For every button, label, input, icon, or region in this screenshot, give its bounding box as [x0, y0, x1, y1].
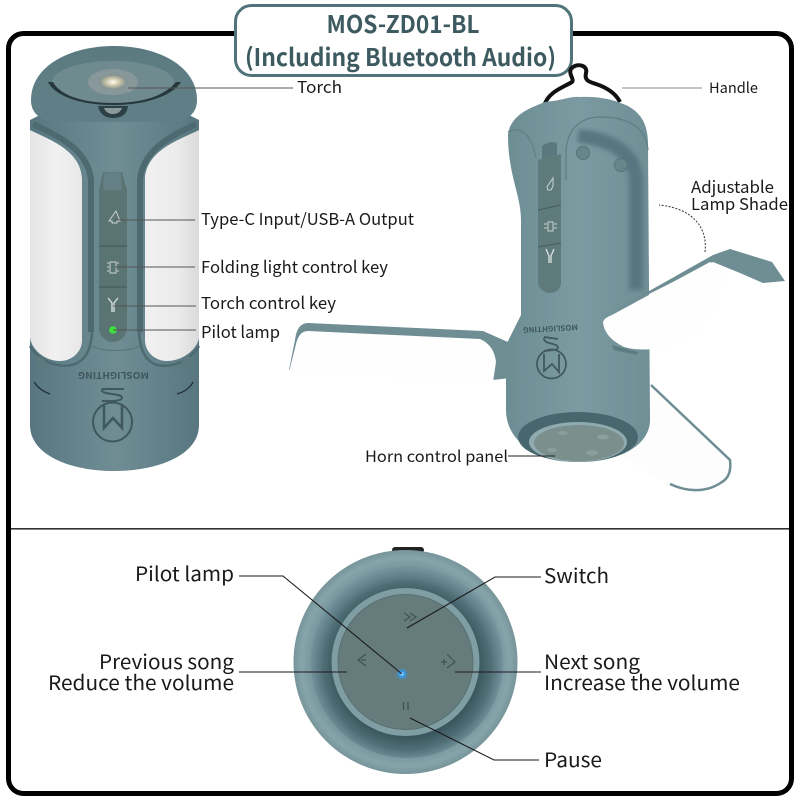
- label: previous song: Previous song: [99, 646, 234, 675]
- logo: MOSLIGHTING: [523, 322, 578, 335]
- lantern body: [506, 97, 650, 462]
- leader: switch: [407, 577, 541, 628]
- top cap: [31, 46, 197, 122]
- leader: folding light: [115, 266, 195, 268]
- label: reduce volume: Reduce the volume: [48, 667, 234, 696]
- left wing: [289, 323, 510, 382]
- label: type-c: Type-C Input/USB-A Output: [201, 206, 414, 230]
- recess: [311, 566, 503, 758]
- lower rim and logo: [30, 332, 199, 442]
- left light panel: [30, 130, 82, 361]
- icon: next: [441, 654, 455, 668]
- leader: handle: [622, 87, 702, 89]
- label: torch key: Torch control key: [201, 290, 336, 314]
- icon: pause: [404, 702, 408, 710]
- panel divider: [11, 528, 789, 530]
- callouts for lantern: [113, 88, 702, 456]
- logo: [523, 322, 578, 378]
- icon: type-c: [109, 211, 120, 223]
- outer shell: [294, 550, 518, 774]
- left shoulder arc: [508, 130, 536, 158]
- label: switch: Switch: [544, 560, 609, 589]
- callouts for panel: [239, 576, 541, 760]
- pilot lamp: green: [109, 326, 117, 334]
- label: torch: Torch: [297, 74, 342, 98]
- top tab: [392, 547, 424, 553]
- label: lamp shade: Lamp Shade: [691, 191, 788, 215]
- title box: (Including Bluetooth Audio): [245, 39, 556, 74]
- lantern body: [30, 112, 199, 471]
- leader: previous: [239, 671, 347, 673]
- icon: torch: [108, 298, 118, 312]
- leader: pause: [410, 718, 539, 760]
- upper right wing: [603, 249, 785, 355]
- label: adjustable: Adjustable: [691, 174, 774, 198]
- icon: folding light: [544, 222, 557, 231]
- horn recess and panel: [518, 412, 638, 462]
- leader: next: [455, 671, 541, 673]
- torch lens: [48, 61, 181, 118]
- stem grooves: [33, 124, 196, 332]
- leader: horn: [508, 455, 555, 457]
- label: pilot lamp: Pilot lamp: [135, 558, 234, 587]
- icon: switch: [404, 613, 416, 621]
- handle: [544, 65, 620, 106]
- label: horn panel: Horn control panel: [365, 445, 508, 467]
- inner recess band: [578, 136, 636, 290]
- icon: folding light: [107, 262, 119, 273]
- label: next song: Next song: [544, 646, 640, 675]
- lower rim and logo: MOSLIGHTING: [78, 369, 149, 383]
- pilot lamp: blue: [396, 668, 408, 680]
- label: folding light: Folding light control key: [201, 254, 388, 278]
- label: increase volume: Increase the volume: [544, 667, 740, 696]
- icon: previous: [358, 654, 366, 666]
- arch outline: [566, 117, 648, 180]
- rivets: [576, 146, 590, 160]
- right light panel: [145, 130, 199, 361]
- product: opened lantern with wings: [289, 65, 785, 490]
- leader: torch: [128, 87, 293, 89]
- button strip: [99, 172, 127, 342]
- button strip: [538, 142, 561, 293]
- title box: [236, 6, 572, 76]
- product: closed lantern front view: [30, 46, 199, 471]
- leader: torch key: [113, 305, 196, 307]
- icon: type-c: [547, 178, 553, 190]
- speaker control panel: [294, 547, 518, 774]
- label: pause: Pause: [544, 744, 602, 773]
- adjustable arrow: [659, 205, 705, 252]
- leader: type-c: [115, 219, 195, 221]
- leader: pilot: [113, 329, 196, 331]
- ring: [332, 588, 480, 736]
- lower wing: [623, 385, 730, 490]
- panel: [338, 594, 473, 730]
- label: handle: Handle: [709, 77, 758, 98]
- icon: torch: [546, 249, 554, 263]
- leader: pilot lamp: [239, 576, 402, 674]
- label: pilot lamp: Pilot lamp: [201, 319, 280, 343]
- title box: MOS-ZD01-BL: [326, 6, 480, 41]
